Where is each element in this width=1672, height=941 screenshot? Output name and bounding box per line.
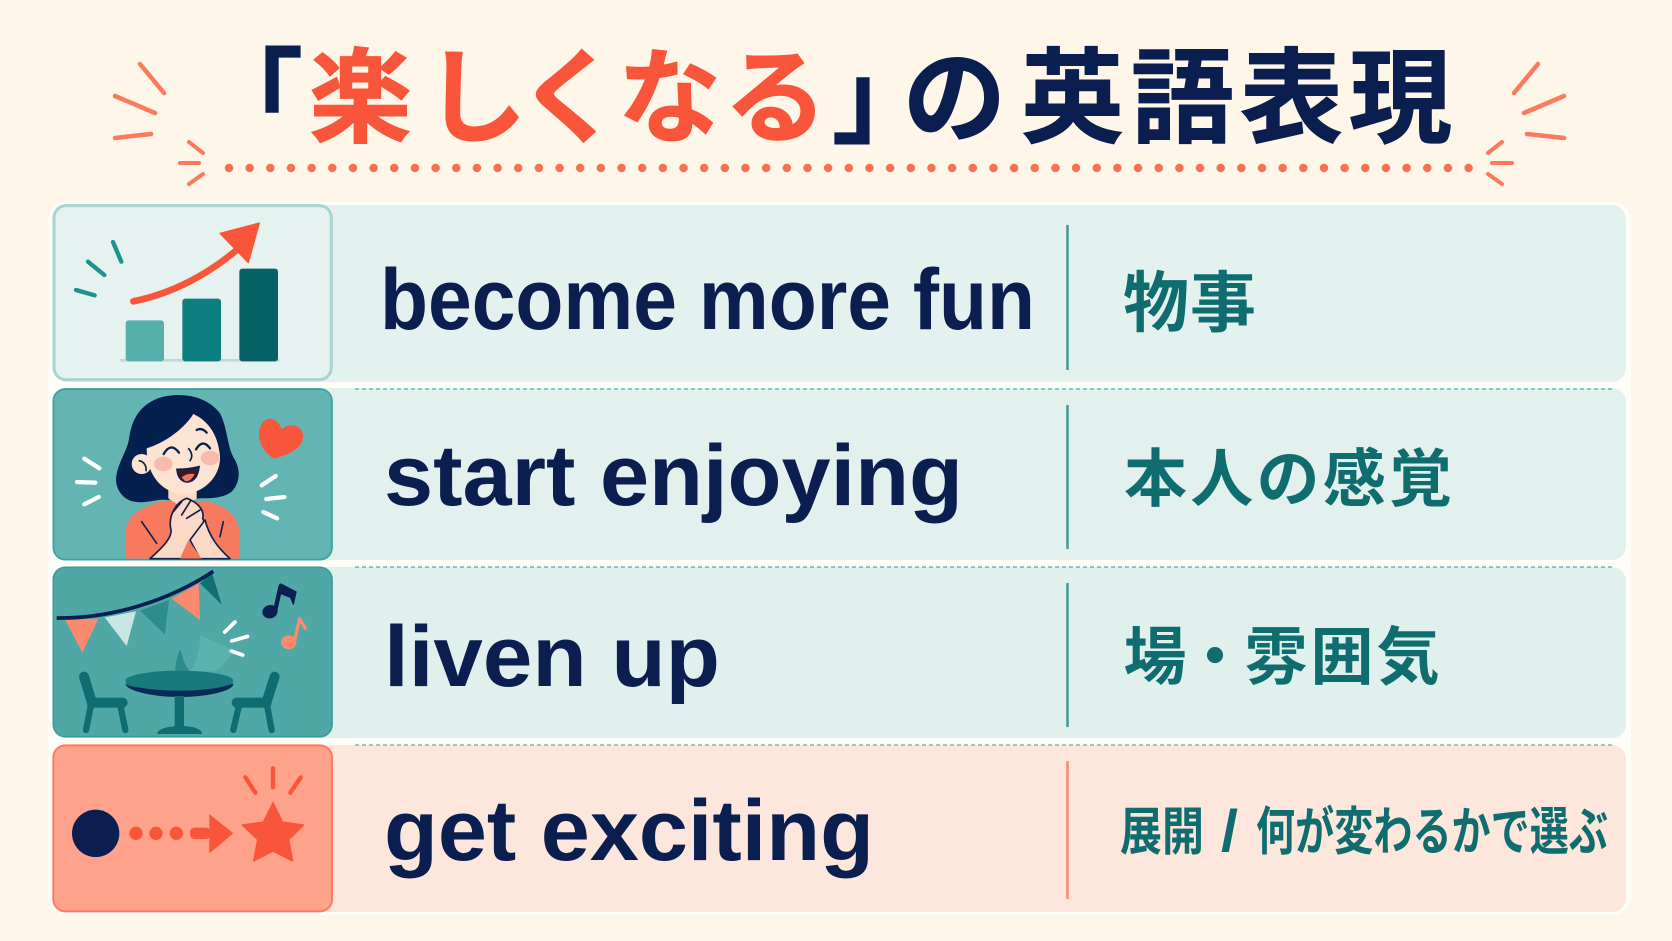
row 4 background bbox=[53, 745, 1626, 912]
title burst left bbox=[115, 64, 203, 184]
mouth bbox=[177, 467, 199, 482]
title dotted underline bbox=[229, 164, 1472, 172]
coral music note bbox=[281, 619, 306, 649]
white sparkle lines bbox=[77, 459, 284, 518]
row 3 background bbox=[53, 567, 1626, 738]
japanese usage label: 場 bbox=[1124, 623, 1186, 693]
title: 現 bbox=[1349, 41, 1452, 156]
divider bbox=[1066, 225, 1069, 370]
row 2 bbox=[53, 388, 1626, 560]
hands bbox=[150, 498, 205, 559]
english phrase: become more fun bbox=[380, 252, 1035, 348]
japanese usage label: ・ bbox=[1184, 623, 1246, 693]
title: 語 bbox=[1131, 41, 1234, 156]
english phrase: start enjoying bbox=[384, 428, 963, 524]
title: 表 bbox=[1240, 41, 1343, 156]
heart bbox=[259, 419, 303, 459]
divider bbox=[1066, 583, 1069, 727]
eyes and brows bbox=[164, 429, 210, 454]
japanese usage label: 囲 bbox=[1310, 623, 1374, 693]
japanese usage label: 物事 bbox=[1123, 266, 1256, 340]
row 1 background bbox=[53, 205, 1626, 382]
neck bbox=[168, 487, 197, 508]
title: の bbox=[903, 41, 1006, 156]
japanese usage label: 本人の感覚 bbox=[1124, 445, 1452, 515]
rising glow bbox=[190, 635, 233, 672]
title: し bbox=[424, 41, 527, 156]
title bbox=[200, 41, 1452, 156]
white table backing bbox=[48, 202, 1631, 915]
divider bbox=[1066, 761, 1069, 899]
white sparkle lines bbox=[225, 622, 248, 655]
title: 英 bbox=[1021, 41, 1124, 156]
japanese usage label: 雰 bbox=[1244, 623, 1308, 693]
hair bbox=[116, 395, 239, 502]
icon: party table bbox=[53, 567, 332, 737]
navy music note bbox=[261, 584, 296, 620]
row 3 bbox=[53, 567, 1626, 738]
english phrase: liven up bbox=[384, 609, 720, 705]
japanese usage label: 気 bbox=[1376, 623, 1440, 693]
title: る bbox=[724, 41, 827, 156]
bunting flags bbox=[65, 619, 98, 653]
japanese usage label bbox=[1120, 799, 1608, 864]
table bbox=[126, 684, 233, 697]
body bbox=[126, 501, 239, 559]
title: 」 bbox=[832, 41, 935, 156]
icon: rising bar chart bbox=[54, 206, 331, 380]
face bbox=[147, 414, 220, 494]
cheeks bbox=[154, 457, 173, 471]
divider bbox=[1066, 405, 1069, 549]
row 4 bbox=[53, 745, 1626, 912]
title burst right bbox=[1488, 64, 1564, 184]
japanese usage label: 展開 bbox=[1120, 804, 1204, 862]
english phrase: get exciting bbox=[384, 783, 874, 879]
row 1 bbox=[53, 205, 1626, 382]
title: な bbox=[618, 41, 721, 156]
icon: dot to star bbox=[53, 745, 332, 911]
chairs bbox=[84, 677, 92, 702]
title: く bbox=[518, 41, 621, 156]
icon: happy woman bbox=[53, 389, 332, 560]
japanese usage label: / bbox=[1221, 799, 1238, 864]
title: 「 bbox=[200, 41, 303, 156]
title: 楽 bbox=[309, 41, 412, 156]
japanese usage label bbox=[1124, 623, 1440, 693]
row 2 background bbox=[53, 388, 1626, 560]
